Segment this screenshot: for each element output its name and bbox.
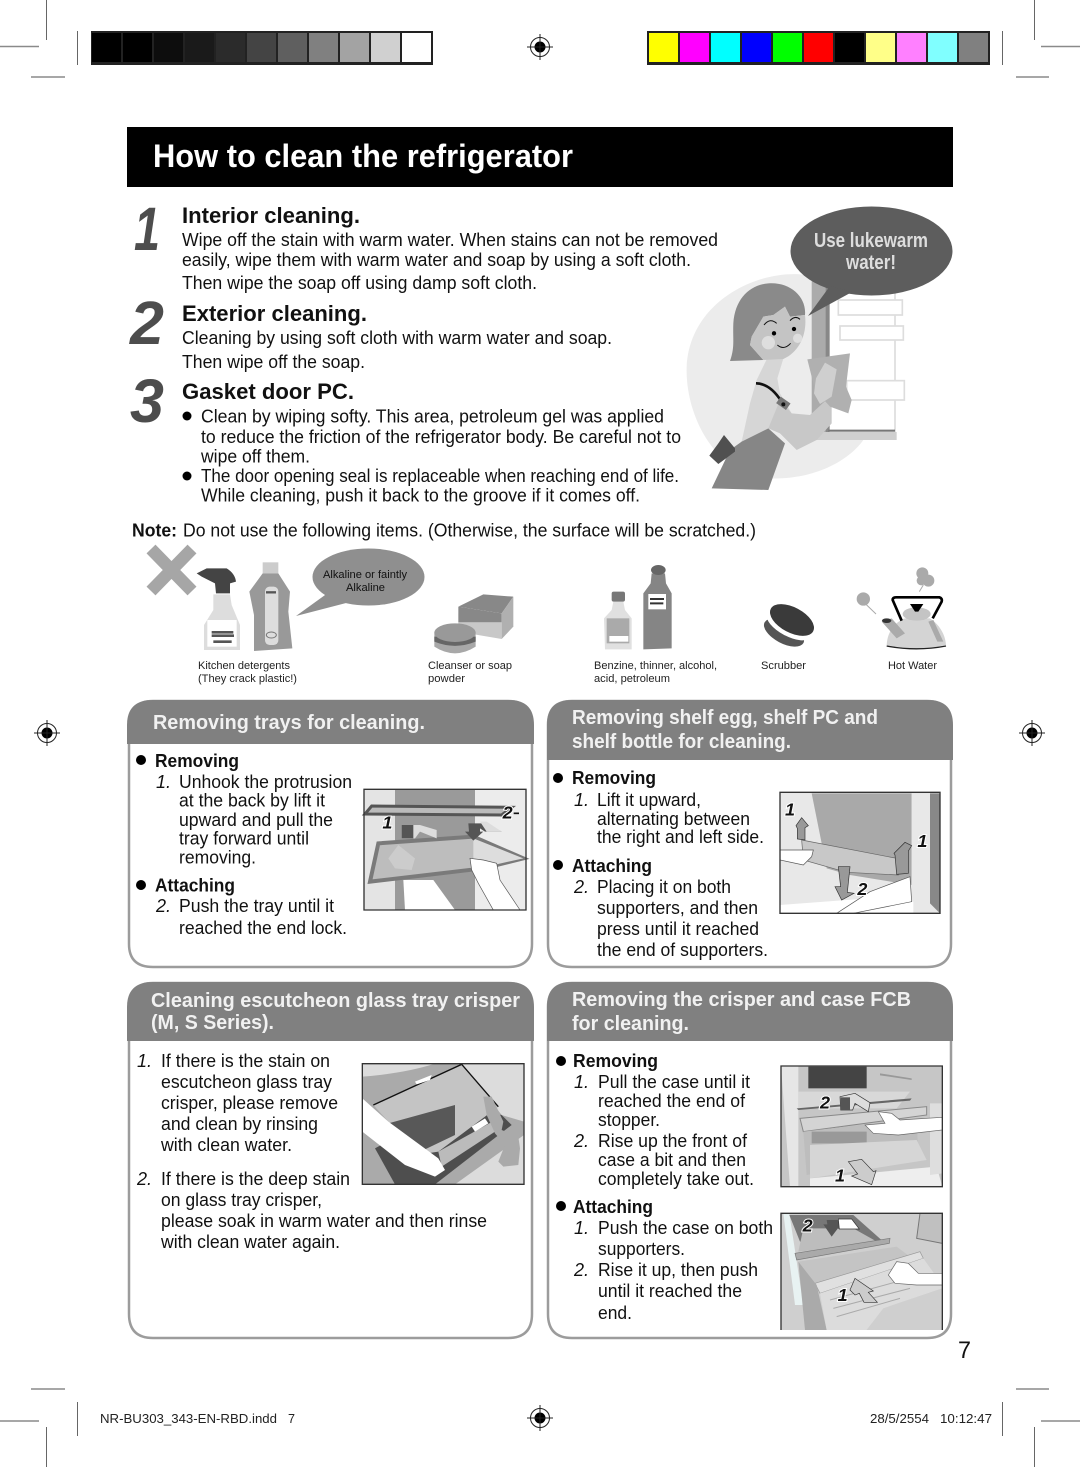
warning item captions [198,660,937,685]
step 3: gasket door PC: 3 [130,367,164,435]
icon: hot water kettle [857,567,946,649]
step 1: interior cleaning: Wipe off the stain with warm water. When stains can not be removed [182,230,718,250]
attaching steps: Rise it up, then push [598,1260,758,1280]
illustration: attaching crisper [781,1213,942,1330]
removing and attaching steps: press until it reached [597,919,759,939]
panel: cleaning escutcheon glass tray crisper [127,982,534,1338]
removing steps [556,1051,754,1189]
warning item captions: Cleanser or soap [428,660,512,672]
removing and attaching steps: upward and pull the [179,810,333,830]
numbered cleaning steps: If there is the stain on [161,1051,330,1071]
removing and attaching steps: at the back by lift it [179,790,325,810]
numbered cleaning steps: on glass tray crisper, [161,1190,322,1210]
speech bubble: use lukewarm water [790,206,952,316]
removing and attaching steps: Attaching [572,856,652,876]
removing and attaching steps [553,768,768,960]
speech bubble: alkaline [296,548,424,616]
removing steps: reached the end of [598,1091,746,1111]
step 3: gasket door PC: wipe off them. [200,446,310,466]
step 2: exterior cleaning: Then wipe off the soap. [182,352,365,372]
step 1: interior cleaning: 1 [134,195,160,263]
speech bubble: use lukewarm water: water! [845,252,896,274]
illustration: removing tray [364,789,526,910]
warning item captions: Kitchen detergents [198,660,290,672]
step 3: gasket door PC: to reduce the friction of the refrigerator body. Be careful not to [201,427,681,447]
grayscale calibration bar [91,31,433,65]
page number: 7 [958,1337,971,1364]
panel heading: shelf bottle for cleaning. [572,731,791,753]
panel heading [547,700,953,760]
attaching steps [556,1197,773,1323]
illustration: removing tray: 2 [502,802,513,822]
removing and attaching steps: 2. [155,896,171,916]
numbered cleaning steps: crisper, please remove [161,1093,338,1113]
attaching steps: 1. [574,1218,589,1238]
warning item captions: (They crack plastic!) [198,673,297,685]
step 3: gasket door PC: Gasket door PC. [182,379,354,404]
illustration: lifting shelf: 1 [917,831,927,851]
attaching steps: supporters. [598,1239,685,1259]
illustration: lifting shelf: 2 [856,879,867,899]
illustration: rinsing glass tray [362,1064,524,1184]
numbered cleaning steps: If there is the deep stain [161,1169,350,1189]
illustration: removing tray: 1 [382,812,392,832]
speech bubble: alkaline: Alkaline or faintly [323,569,407,581]
note line: Do not use the following items. (Otherwise, the surface will be scratched.) [183,520,756,540]
attaching steps: Attaching [573,1197,653,1217]
removing and attaching steps: Removing [572,768,656,788]
illustration: lifting shelf [780,792,940,913]
removing and attaching steps: Attaching [155,876,235,896]
panel heading [127,982,534,1041]
panel: removing trays [127,700,534,967]
print slug right [870,1411,992,1426]
numbered cleaning steps: 2. [136,1169,152,1189]
print slug right: 28/5/2554 [870,1411,929,1426]
step 1: interior cleaning: Interior cleaning. [182,203,360,228]
panel: removing shelf egg [547,700,953,967]
numbered cleaning steps [136,1051,487,1252]
warning item captions: Scrubber [761,660,806,672]
removing and attaching steps: alternating between [597,809,750,829]
attaching steps: 2. [573,1260,589,1280]
step 3: gasket door PC [130,367,681,506]
illustration: attaching crisper: 1 [838,1285,848,1305]
removing and attaching steps: the right and left side. [597,827,764,847]
attaching steps: until it reached the [598,1281,742,1301]
icon: cleanser and soap powder [434,594,513,653]
icon: scrubber [760,598,819,652]
removing steps: 2. [573,1131,589,1151]
step 2: exterior cleaning: Exterior cleaning. [182,301,367,326]
step 3: gasket door PC: Clean by wiping softy. This area, petroleum gel was applied [201,406,664,426]
icon: kitchen detergents bottles [197,562,292,651]
speech bubble: alkaline: Alkaline [346,582,385,594]
warning item captions: acid, petroleum [594,673,670,685]
removing and attaching steps: Lift it upward, [597,790,701,810]
note line: Note: [132,520,177,540]
numbered cleaning steps: escutcheon glass tray [161,1072,332,1092]
illustration: attaching crisper: 2 [802,1216,813,1236]
removing steps: Pull the case until it [598,1072,750,1092]
panel heading: Removing shelf egg, shelf PC and [572,707,878,729]
illustration: removing crisper [781,1066,942,1187]
illustration: woman wiping refrigerator [687,274,904,490]
warning item captions: powder [428,673,465,685]
panel heading: Removing the crisper and case FCB [572,989,911,1011]
removing steps: case a bit and then [598,1150,746,1170]
panel heading: for cleaning. [572,1013,689,1035]
attaching steps: end. [598,1303,632,1323]
print slug left: NR-BU303_343-EN-RBD.indd [100,1411,277,1426]
removing steps: completely take out. [598,1169,754,1189]
panel heading [127,700,534,744]
removing and attaching steps: Unhook the protrusion [179,772,352,792]
step 1: interior cleaning: Then wipe the soap off using damp soft cloth. [182,273,537,293]
colour calibration bar [647,31,990,65]
removing and attaching steps: removing. [179,848,256,868]
title banner: How to clean the refrigerator [153,138,573,174]
step 3: gasket door PC: While cleaning, push it back to the groove if it comes off. [201,486,640,506]
attaching steps: Push the case on both [598,1218,773,1238]
step 1: interior cleaning: easily, wipe them with warm water and soap by using a soft cloth. [182,250,691,270]
removing and attaching steps [136,751,352,938]
removing and attaching steps: Placing it on both [597,877,731,897]
numbered cleaning steps: 1. [137,1051,152,1071]
removing and attaching steps: Removing [155,751,239,771]
title banner [127,127,953,187]
panel heading: (M, S Series). [151,1012,274,1034]
speech bubble: use lukewarm water: Use lukewarm [814,230,928,252]
removing steps: stopper. [598,1110,660,1130]
step 1: interior cleaning [134,195,718,293]
icon: benzine and thinner bottles [604,565,672,649]
panel heading: Removing trays for cleaning. [153,712,425,734]
removing and attaching steps: Push the tray until it [179,896,334,916]
step 2: exterior cleaning: Cleaning by using soft cloth with warm water and soap. [182,328,612,348]
step 2: exterior cleaning: 2 [129,289,164,357]
removing and attaching steps: 2. [573,877,589,897]
removing and attaching steps: 1. [574,790,589,810]
illustration: lifting shelf: 1 [785,800,795,820]
removing steps: 1. [574,1072,589,1092]
panel heading [547,982,953,1041]
warning item captions: Benzine, thinner, alcohol, [594,660,717,672]
numbered cleaning steps: with clean water. [160,1135,292,1155]
numbered cleaning steps: with clean water again. [160,1232,340,1252]
removing steps: Rise up the front of [598,1131,748,1151]
panel heading: Cleaning escutcheon glass tray crisper [151,990,520,1012]
removing steps: Removing [573,1051,658,1071]
removing and attaching steps: 1. [156,772,171,792]
removing and attaching steps: tray forward until [179,828,309,848]
warning item captions: Hot Water [888,660,937,672]
panel: removing crisper and case FCB [547,982,953,1338]
print slug left: 7 [288,1411,295,1426]
removing and attaching steps: the end of supporters. [597,940,768,960]
illustration: removing crisper: 1 [835,1166,845,1186]
step 2: exterior cleaning [129,289,612,372]
print slug right: 10:12:47 [940,1411,992,1426]
numbered cleaning steps: and clean by rinsing [161,1114,318,1134]
removing and attaching steps: supporters, and then [597,898,758,918]
illustration: removing crisper: 2 [819,1092,830,1112]
step 3: gasket door PC: The door opening seal is replaceable when reaching end of life. [201,466,679,486]
removing and attaching steps: reached the end lock. [179,918,347,938]
numbered cleaning steps: please soak in warm water and then rinse [161,1211,487,1231]
icon: prohibited X [151,549,192,591]
